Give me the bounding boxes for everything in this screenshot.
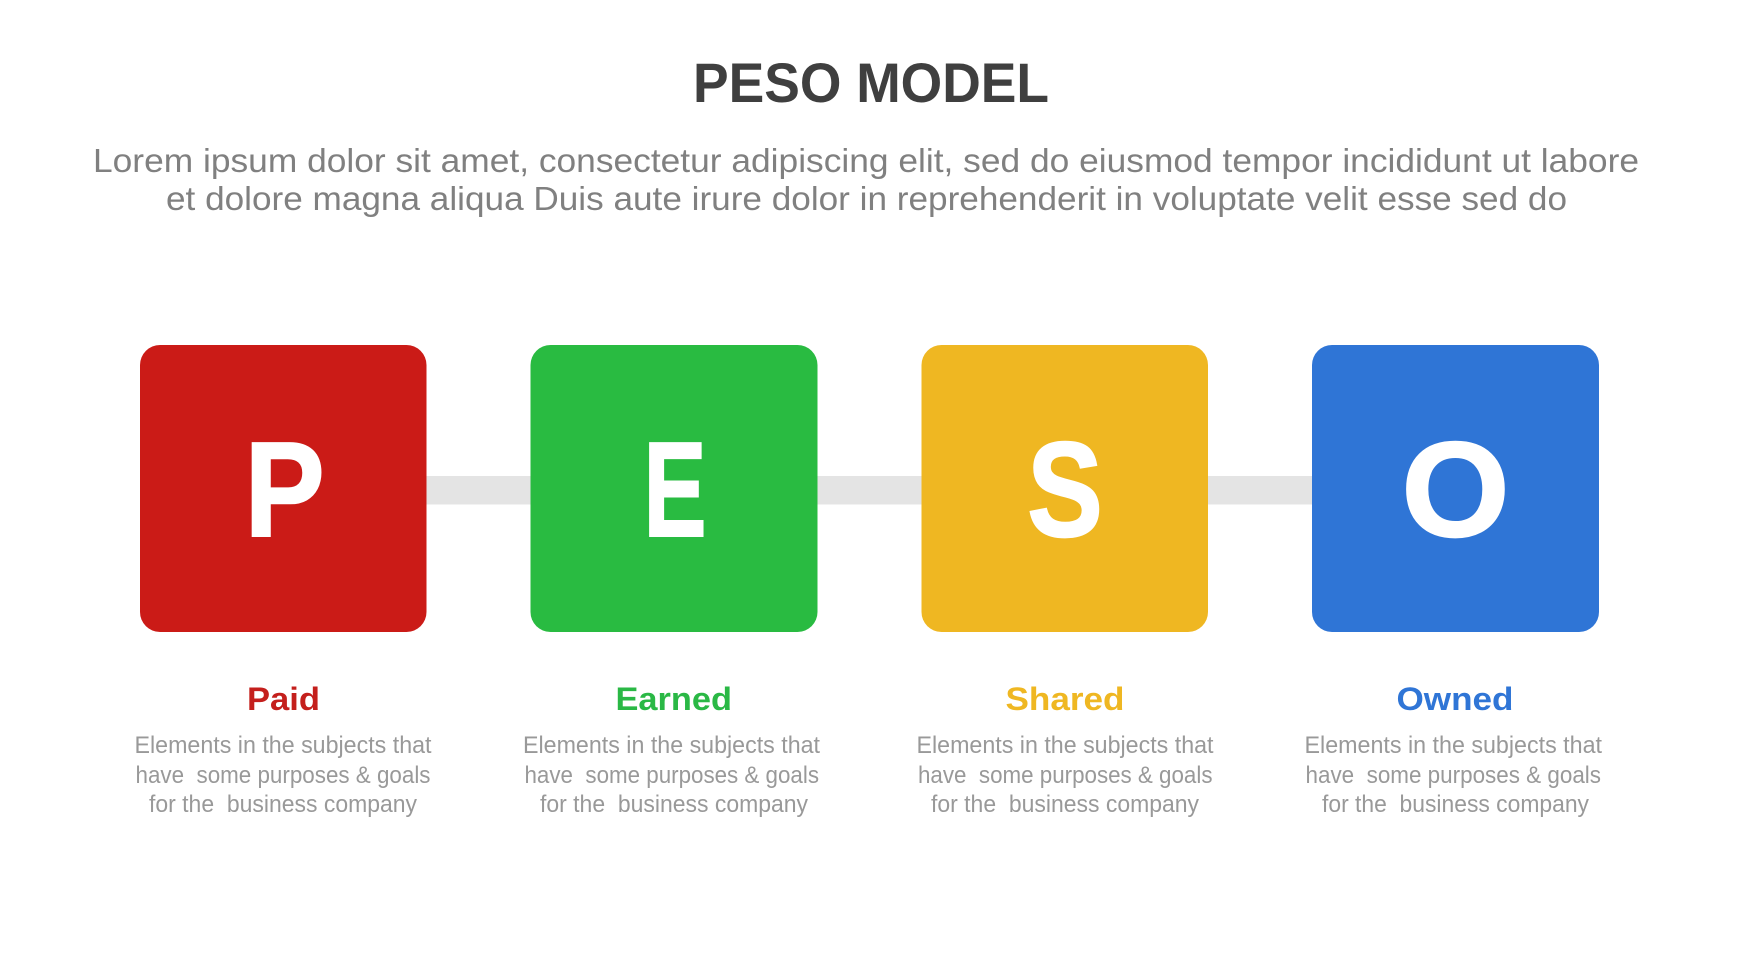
letter P: P (245, 415, 325, 566)
earned square (530, 345, 818, 632)
paid description: Elements in the subjects that (134, 732, 432, 759)
subtitle text block (93, 142, 1639, 217)
earned description: for the business company (540, 791, 808, 818)
earned description: have some purposes & goals (524, 762, 819, 789)
owned description: have some purposes & goals (1306, 762, 1601, 789)
earned description (523, 732, 820, 818)
panel: earned (523, 345, 820, 818)
earned description: Elements in the subjects that (523, 732, 820, 759)
panel: shared (916, 345, 1214, 818)
subtitle text block: et dolore magna aliqua Duis aute irure dolor in reprehenderit in voluptate velit esse sed do (166, 180, 1567, 217)
panel: paid (134, 345, 432, 818)
letter O: O (1401, 415, 1510, 566)
shared heading: Shared (1006, 681, 1124, 717)
owned description: Elements in the subjects that (1304, 732, 1602, 759)
paid description: have some purposes & goals (136, 762, 430, 789)
owned description (1304, 732, 1602, 818)
earned heading: Earned (616, 681, 732, 717)
shared description: Elements in the subjects that (916, 732, 1214, 759)
shared description: for the business company (931, 791, 1199, 818)
owned heading: Owned (1396, 681, 1514, 717)
paid description: for the business company (149, 791, 417, 818)
letter S: S (1027, 415, 1103, 565)
paid square (140, 345, 426, 632)
paid description (134, 732, 432, 818)
owned square (1312, 345, 1599, 632)
connector bars (426, 476, 1313, 504)
title: PESO MODEL (693, 51, 1049, 114)
shared description: have some purposes & goals (918, 762, 1212, 789)
shared square (922, 345, 1208, 632)
subtitle text block: Lorem ipsum dolor sit amet, consectetur adipiscing elit, sed do eiusmod tempor incididunt ut labore (93, 142, 1639, 179)
owned description: for the business company (1322, 791, 1589, 818)
panel: owned (1304, 345, 1602, 818)
shared description (916, 732, 1214, 818)
paid heading: Paid (247, 681, 320, 717)
letter E: E (643, 414, 707, 565)
